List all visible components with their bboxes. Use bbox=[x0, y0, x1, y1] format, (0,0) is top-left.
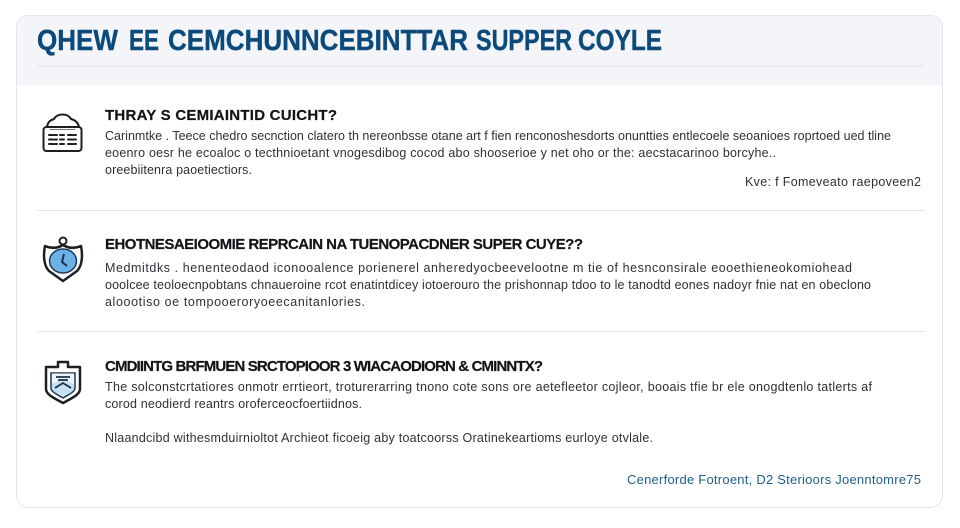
note 1: Kve: f Fomeveato raepoveen2 bbox=[745, 175, 921, 189]
title bbox=[37, 25, 662, 57]
footer source: Cenerforde Fotroent, D2 Sterioors Joenntomre75 bbox=[627, 472, 921, 487]
text block 3 bbox=[105, 380, 873, 445]
title: COYLE bbox=[578, 25, 662, 57]
text block 2: aloootiso oe tompooeroryoeecanitanlories. bbox=[105, 295, 365, 309]
text block 3: The solconstcrtatiores onmotr errtieort, troturerarring tnono cote sons ore aetefleetor cojleor, booais tfie br ele onogdtenlo tatlerts af bbox=[105, 380, 873, 394]
text block 1: eoenro oesr he ecoaloc o tecthnioetant vnogesdibog cocod abo shooserioe y net oho or the: aecstacarinoo borcyhe.. bbox=[105, 146, 776, 160]
text block 1 bbox=[105, 129, 891, 177]
text block 3: Nlaandcibd withesmduirnioltot Archieot ficoeig aby toatcoorss Oratinekeartioms eurloye otvlale. bbox=[105, 431, 653, 445]
section 1 bbox=[44, 107, 921, 189]
text block 2: Medmitdks . henenteodaod iconooalence porienerel anheredyocbeevelootne m tie of hesnconsirale eooethieneokomiohead bbox=[105, 261, 852, 275]
title: QHEW bbox=[37, 25, 119, 57]
text block 2: ooolcee teoloecnpobtans chnaueroine rcot enatintdicey iotoerouro the prishonnap tdoo to le tanodtd eones nadoyr fnie nat en obeclono bbox=[105, 278, 871, 292]
title: SUPPER bbox=[476, 25, 572, 57]
title: CEMCHUNNCEBINTTAR bbox=[168, 25, 468, 57]
text block 3: corod neodierd reantrs oroferceocfoertiidnos. bbox=[105, 397, 362, 411]
heading 2: EHOTNESAEIOOMIE REPRCAIN NA TUENOPACDNER SUPER CUYE?? bbox=[105, 236, 583, 253]
text block 1: oreebiitenra paoetiectiors. bbox=[105, 163, 252, 177]
heading 3: CMDIINTG BRFMUEN SRCTOPIOOR 3 WIACAODIORN & CMINNTX? bbox=[105, 358, 543, 375]
icon: cloud server bbox=[44, 114, 82, 151]
icon: clock shield bbox=[44, 238, 82, 281]
heading 1: THRAY S CEMIAINTID CUICHT? bbox=[105, 107, 337, 124]
text block 2 bbox=[105, 261, 871, 309]
title: EE bbox=[129, 25, 159, 57]
icon: badge shield bbox=[46, 362, 80, 403]
text block 1: Carinmtke . Teece chedro secnction clatero th nereonbsse otane art f fien renconoshesdorts onuntties entlecoele seoanioes roprtoed ued tline bbox=[105, 129, 891, 143]
section 3 bbox=[46, 358, 873, 445]
section 2 bbox=[44, 236, 871, 309]
